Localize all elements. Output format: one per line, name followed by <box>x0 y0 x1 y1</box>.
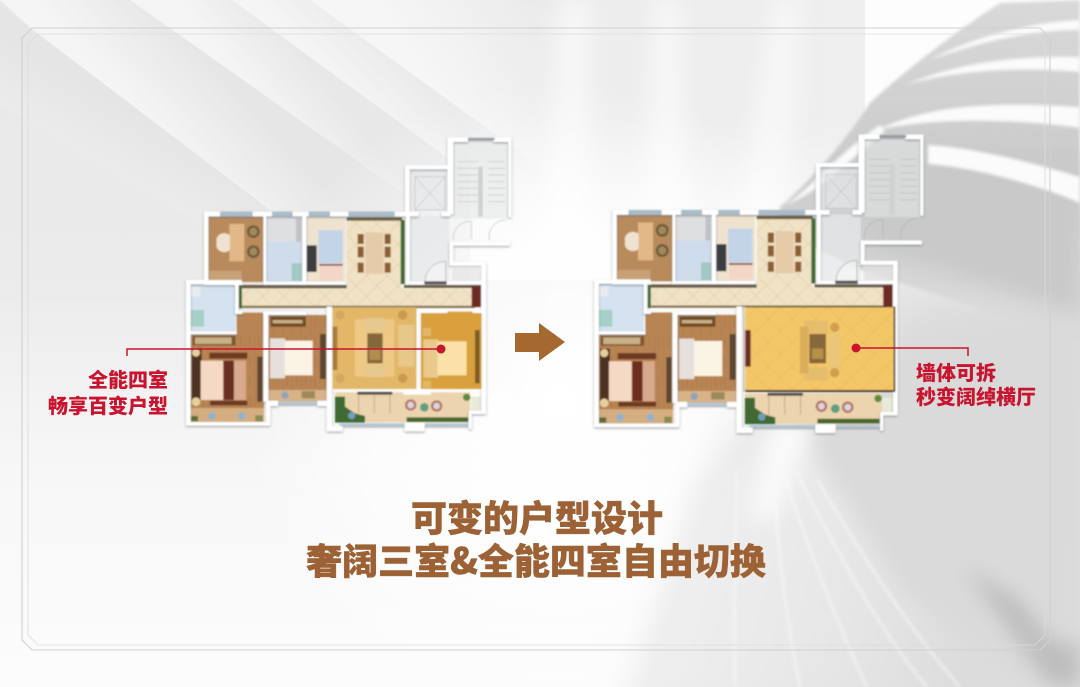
title: 可变的户型设计 <box>411 490 663 542</box>
open living hall <box>743 307 895 393</box>
right callout <box>852 344 1036 410</box>
right callout: 秒变阔绰横厅 <box>916 381 1036 410</box>
left callout <box>48 344 446 419</box>
arrow <box>515 323 565 361</box>
bedroom: convertible room <box>403 310 482 395</box>
left callout: 畅享百变户型 <box>48 390 168 419</box>
right callout: 墙体可拆 <box>916 357 996 386</box>
title: 奢阔三室&全能四室自由切换 <box>306 533 766 585</box>
living room <box>333 307 417 389</box>
floor plan: left, four-bedroom layout <box>186 137 511 431</box>
floor plan: right, open-plan living layout <box>594 135 923 433</box>
left callout: 全能四室 <box>88 364 168 393</box>
title <box>306 490 766 585</box>
